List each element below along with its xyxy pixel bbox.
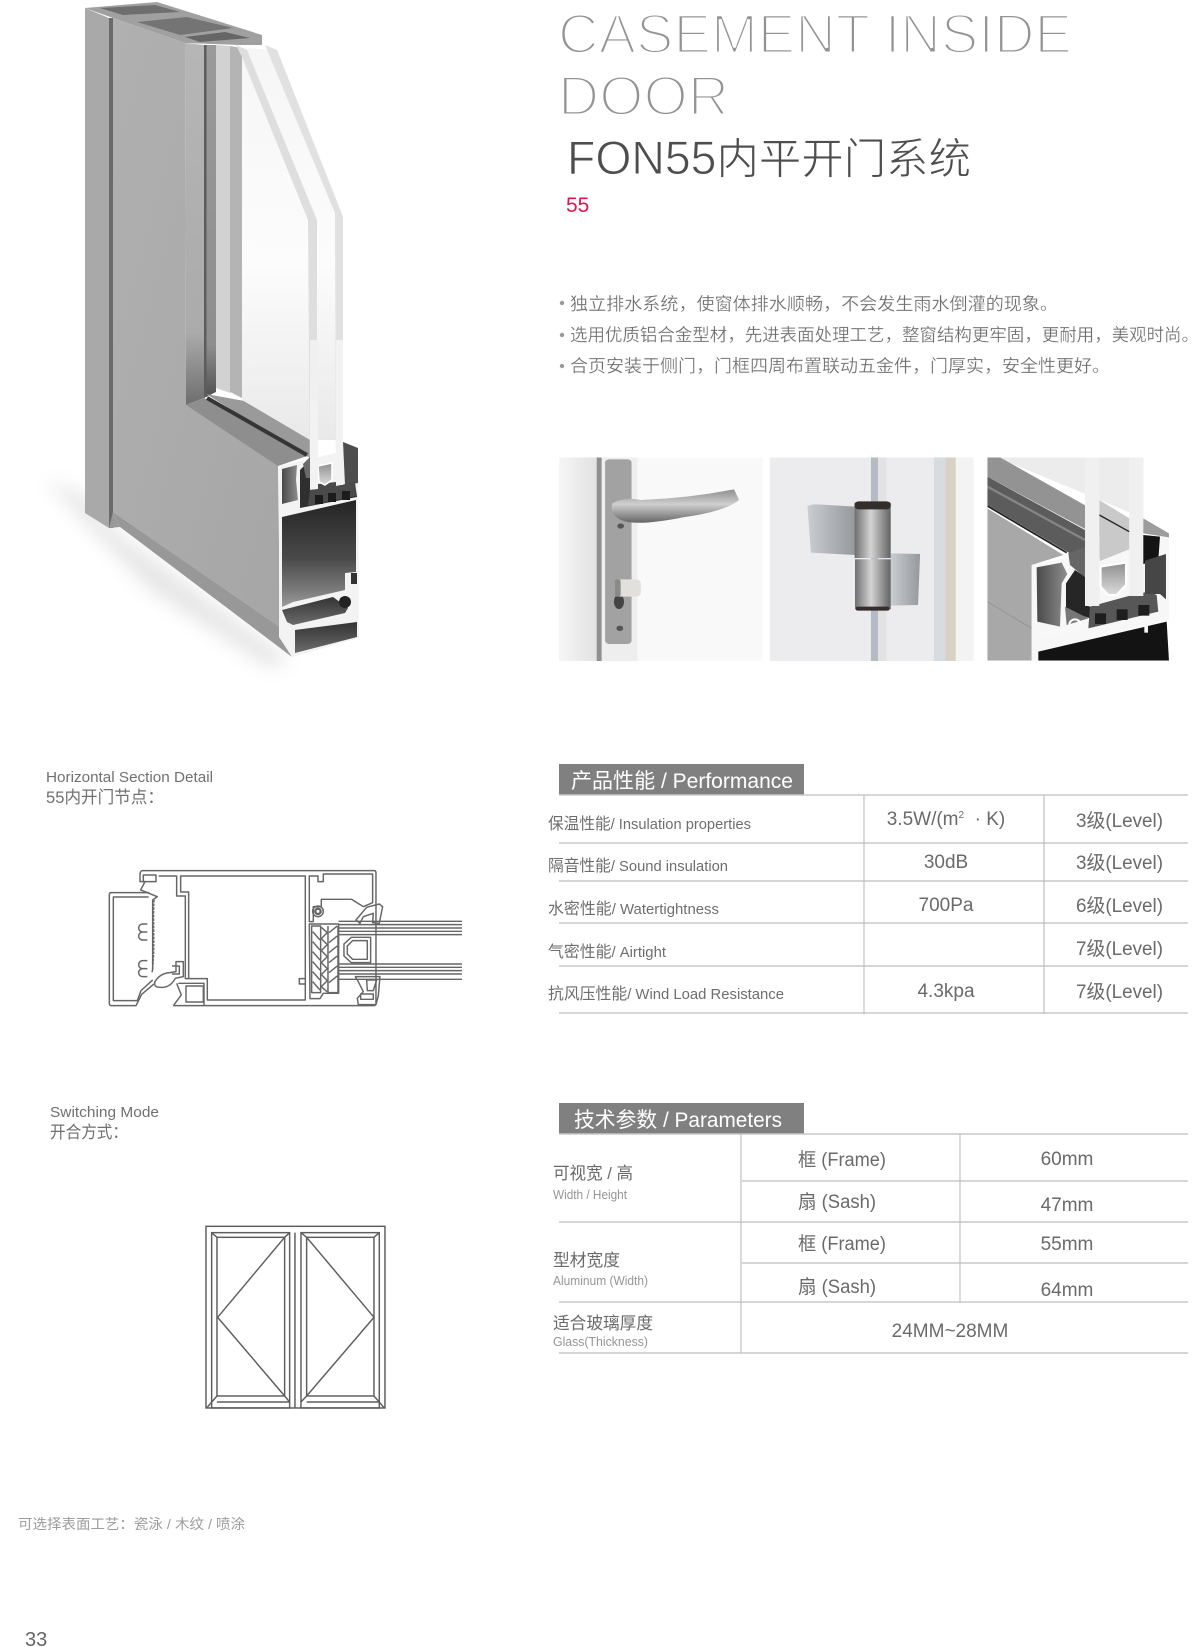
performance levels: 3级(Level) <box>1076 810 1163 832</box>
performance row labels: 隔音性能/ Sound insulation <box>548 857 728 875</box>
performance levels <box>1076 810 1163 1003</box>
performance header <box>559 764 804 795</box>
series number: 55 <box>566 194 589 217</box>
performance table <box>548 764 1188 1014</box>
performance row labels: 气密性能/ Airtight <box>548 943 667 961</box>
performance levels: 3级(Level) <box>1076 852 1163 874</box>
photo: door handle <box>559 457 739 661</box>
parameters header: 技术参数 / Parameters <box>574 1109 782 1132</box>
title: English: CASEMENT INSIDE <box>558 2 1072 65</box>
title: Chinese system name: FON55内平开门系统 <box>567 131 971 184</box>
profile cross-section face <box>279 400 359 657</box>
performance levels: 7级(Level) <box>1076 981 1163 1003</box>
parameter sub-rows <box>798 1149 886 1298</box>
title: English: DOOR <box>558 64 729 127</box>
performance levels: 6级(Level) <box>1076 895 1163 917</box>
surface finish note: 可选择表面工艺：瓷泳 / 木纹 / 喷涂 <box>18 1516 245 1532</box>
parameter values: 24MM~28MM <box>892 1321 1008 1342</box>
parameter values <box>892 1149 1093 1342</box>
performance row labels <box>548 815 784 1003</box>
parameter row labels: 可视宽 / 高 <box>553 1164 633 1183</box>
parameter values: 55mm <box>1041 1234 1093 1255</box>
performance header: 产品性能 / Performance <box>571 770 793 793</box>
parameter sub-rows: 框 (Frame) <box>798 1149 886 1171</box>
parameter row labels: Aluminum (Width) <box>553 1273 648 1288</box>
parameters table <box>553 1103 1188 1353</box>
section drawing caption <box>46 769 213 807</box>
parameter values: 64mm <box>1041 1280 1093 1301</box>
title: English <box>558 2 1072 127</box>
performance row labels: 水密性能/ Watertightness <box>548 900 719 918</box>
performance row labels: 保温性能/ Insulation properties <box>548 815 751 833</box>
switching mode caption: Switching Mode <box>50 1104 159 1121</box>
performance values <box>887 809 1005 1002</box>
parameter values: 47mm <box>1041 1195 1093 1216</box>
performance values: 2 <box>959 810 965 821</box>
parameter row labels: 适合玻璃厚度 <box>553 1314 653 1333</box>
performance row labels: 抗风压性能/ Wind Load Resistance <box>548 985 784 1003</box>
performance values: 30dB <box>924 852 968 873</box>
parameters header <box>559 1103 804 1134</box>
parameter sub-rows: 扇 (Sash) <box>798 1191 876 1213</box>
switching mode caption <box>50 1104 159 1142</box>
performance values: 700Pa <box>919 895 974 916</box>
feature list: 合页安装于侧门，门框四周布置联动五金件，门厚实，安全性更好。 <box>570 356 1110 376</box>
parameter row labels: Glass(Thickness) <box>553 1334 648 1349</box>
photo: door hinge <box>770 457 973 661</box>
parameter sub-rows: 框 (Frame) <box>798 1233 886 1255</box>
section drawing caption: Horizontal Section Detail <box>46 769 213 786</box>
photo: profile glazing detail <box>987 457 1169 661</box>
performance values: 4.3kpa <box>917 981 975 1002</box>
performance levels: 7级(Level) <box>1076 938 1163 960</box>
feature list <box>560 294 1199 376</box>
performance values: · K) <box>964 809 1005 830</box>
parameter sub-rows: 扇 (Sash) <box>798 1276 876 1298</box>
parameter row labels: Width / Height <box>553 1187 627 1202</box>
casement opening diagram <box>206 1226 385 1408</box>
parameter row labels: 型材宽度 <box>553 1251 620 1270</box>
feature list: 独立排水系统，使窗体排水顺畅，不会发生雨水倒灌的现象。 <box>570 294 1058 314</box>
section drawing caption: 55内开门节点： <box>46 788 164 807</box>
switching mode caption: 开合方式： <box>50 1123 128 1142</box>
feature list: 选用优质铝合金型材，先进表面处理工艺，整窗结构更牢固，更耐用，美观时尚。 <box>570 325 1199 345</box>
horizontal section drawing <box>109 871 462 1006</box>
product photo: door profile cutaway <box>45 2 359 668</box>
parameter values: 60mm <box>1041 1149 1093 1170</box>
performance values: 3.5W/(m <box>887 809 959 830</box>
parameter row labels <box>553 1164 653 1349</box>
